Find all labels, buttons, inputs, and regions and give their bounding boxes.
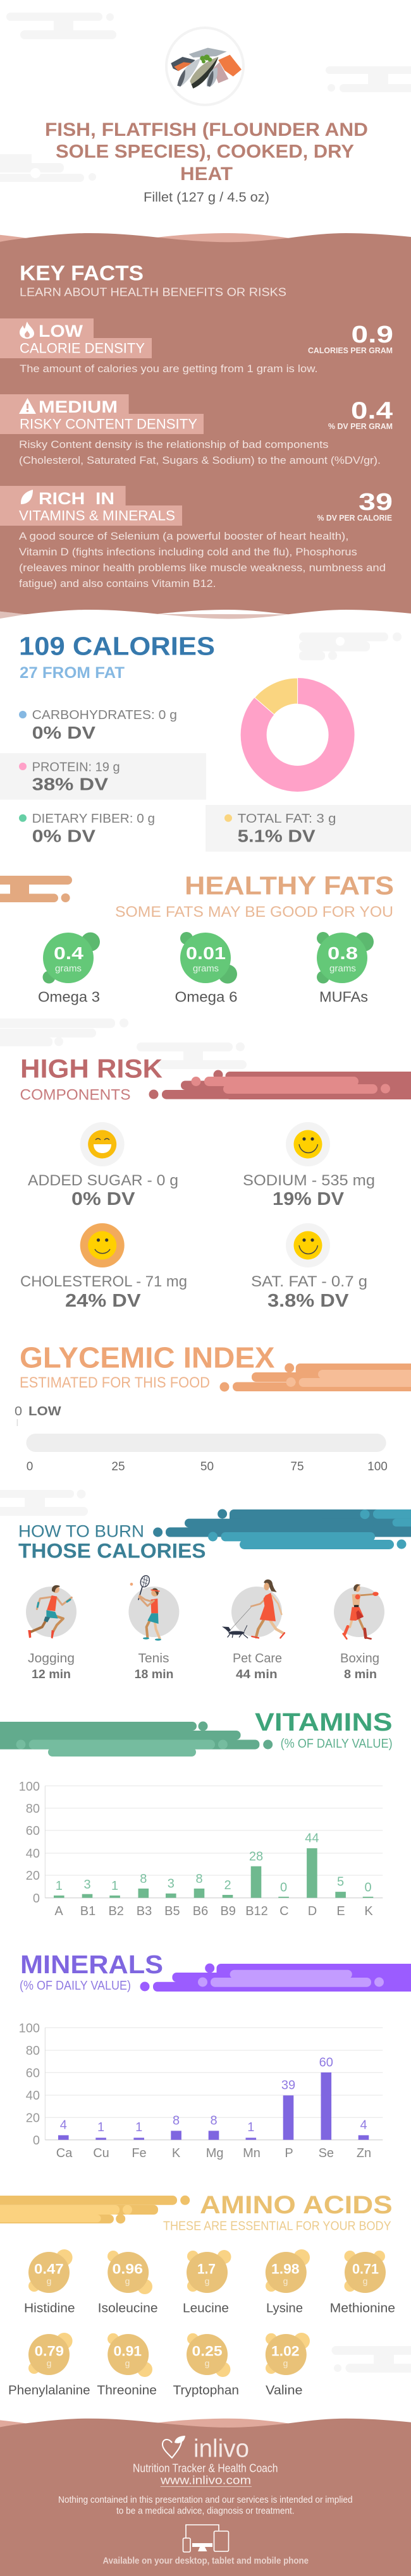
bar chart: vitamins: 3 bbox=[83, 1878, 91, 1892]
heading: AMINO ACIDS bbox=[200, 2191, 393, 2219]
macro: carbohydrates bbox=[19, 708, 177, 742]
bar chart: minerals: 4 bbox=[360, 2118, 367, 2132]
heading: 109 CALORIES bbox=[19, 632, 215, 661]
fact: rich in vitamins and minerals: 39 bbox=[359, 489, 393, 516]
bar chart: vitamins: K bbox=[364, 1904, 373, 1918]
stat: MUFAs: 0.8 bbox=[328, 943, 358, 963]
macro: total fat: 5.1% DV bbox=[238, 826, 316, 846]
fact: risky content density bbox=[0, 394, 393, 466]
fact: rich in vitamins and minerals: A good source of Selenium (a powerful booster of heart health), bbox=[19, 530, 348, 542]
title: HEAT bbox=[180, 164, 233, 184]
fact: risky content density: MEDIUM bbox=[39, 397, 118, 416]
heading bbox=[20, 1341, 275, 1391]
ornament bbox=[153, 1509, 411, 1549]
item: added sugar: 0% DV bbox=[71, 1189, 135, 1209]
gauge: LOW bbox=[28, 1405, 61, 1418]
icon: devices bbox=[183, 2525, 229, 2552]
bar chart: vitamins: 80 bbox=[26, 1802, 40, 1816]
amino: methionine bbox=[330, 2251, 395, 2315]
title bbox=[45, 119, 368, 184]
bar chart: vitamins: B6 bbox=[193, 1904, 208, 1918]
stat: omega 3: Omega 3 bbox=[38, 989, 100, 1005]
bar chart: minerals: 80 bbox=[26, 2044, 40, 2058]
item: saturated fat bbox=[251, 1223, 367, 1311]
gauge: 50 bbox=[200, 1460, 214, 1473]
bar chart: vitamins: 2 bbox=[224, 1878, 231, 1892]
heading: HOW TO BURN bbox=[18, 1521, 144, 1540]
bar chart: vitamins: E bbox=[336, 1904, 345, 1918]
macro: dietary fiber bbox=[19, 812, 155, 846]
bar chart: minerals: Mg bbox=[206, 2146, 223, 2160]
disclaimer bbox=[58, 2494, 353, 2516]
amino: methionine: 0.71 bbox=[352, 2261, 379, 2277]
heading: COMPONENTS bbox=[20, 1087, 130, 1104]
bar chart: minerals: 60 bbox=[26, 2066, 40, 2080]
bar chart: vitamins: B2 bbox=[108, 1904, 124, 1918]
amino: phenylalanine bbox=[8, 2333, 90, 2397]
macro: protein: PROTEIN: 19 g bbox=[32, 760, 120, 774]
panel: amino acids bbox=[0, 2191, 395, 2397]
ornament bbox=[0, 876, 72, 902]
amino: phenylalanine: Phenylalanine bbox=[8, 2383, 90, 2397]
stat: omega 6: 0.01 bbox=[186, 943, 226, 963]
heading: HIGH RISK bbox=[20, 1054, 163, 1084]
fact: calorie density: CALORIE DENSITY bbox=[20, 341, 145, 356]
bar chart: vitamins: 40 bbox=[26, 1847, 40, 1861]
panel: glycemic index bbox=[15, 1341, 411, 1473]
fact: risky content density: % DV PER GRAM bbox=[328, 422, 393, 431]
bar chart: vitamins bbox=[19, 1780, 383, 1918]
fact: rich in vitamins and minerals: RICH IN bbox=[39, 489, 114, 508]
gauge: 0 bbox=[15, 1405, 22, 1418]
fact: risky content density: Risky Content density is the relationship of bad components bbox=[19, 438, 329, 450]
heading bbox=[20, 1950, 163, 1993]
title: FISH, FLATFISH (FLOUNDER AND bbox=[45, 119, 368, 140]
heading: SOME FATS MAY BE GOOD FOR YOU bbox=[115, 904, 393, 921]
gauge bbox=[15, 1405, 388, 1473]
bar chart: vitamins: 100 bbox=[19, 1780, 40, 1794]
amino: histidine: 0.47 bbox=[34, 2261, 64, 2277]
bar chart: minerals: 20 bbox=[26, 2112, 40, 2126]
item: cholesterol bbox=[20, 1223, 187, 1311]
panel: key facts bbox=[0, 233, 411, 619]
heading: (% OF DAILY VALUE) bbox=[281, 1737, 393, 1751]
panel: footer bbox=[0, 2419, 411, 2576]
bar chart: vitamins: 5 bbox=[337, 1875, 344, 1889]
amino: histidine: g bbox=[47, 2276, 51, 2286]
bar chart: vitamins: B5 bbox=[164, 1904, 180, 1918]
amino: lysine bbox=[266, 2249, 310, 2315]
ornament bbox=[149, 1070, 411, 1099]
bar chart: vitamins: 44 bbox=[305, 1832, 319, 1846]
bar chart: minerals: 1 bbox=[247, 2120, 254, 2134]
fact: risky content density: 0.4 bbox=[351, 398, 393, 425]
heading: THESE ARE ESSENTIAL FOR YOUR BODY bbox=[163, 2219, 391, 2233]
amino: leucine: 1.7 bbox=[197, 2261, 216, 2277]
fact: rich in vitamins and minerals: Vitamin D (fights infections including cold and the flu), Phosphorus bbox=[19, 546, 357, 558]
fact: calorie density bbox=[0, 318, 393, 375]
ornament bbox=[0, 2196, 190, 2223]
stat: MUFAs: grams bbox=[329, 964, 356, 974]
bar chart: vitamins: 0 bbox=[280, 1881, 287, 1895]
fact: risky content density: (Cholesterol, Saturated Fat, Sugars & Sodium) to the amount (%DV/gr). bbox=[19, 454, 381, 466]
availability note: Available on your desktop, tablet and mobile phone bbox=[102, 2555, 309, 2566]
macro: dietary fiber: DIETARY FIBER: 0 g bbox=[32, 812, 155, 826]
bar chart: vitamins: 8 bbox=[140, 1872, 147, 1886]
bar chart: vitamins: 3 bbox=[168, 1877, 175, 1891]
panel: how to burn those calories bbox=[18, 1509, 411, 1681]
item: added sugar bbox=[28, 1122, 178, 1209]
fact: rich in vitamins and minerals: (releaves minor health problems like muscle weakness, numbness and bbox=[19, 562, 386, 574]
bar chart: vitamins: 0 bbox=[364, 1881, 372, 1895]
amino: tryptophan bbox=[173, 2333, 239, 2397]
item: added sugar: ADDED SUGAR - 0 g bbox=[28, 1172, 178, 1189]
fact: calorie density: CALORIES PER GRAM bbox=[308, 346, 393, 355]
heading: ESTIMATED FOR THIS FOOD bbox=[20, 1374, 210, 1391]
amino: phenylalanine: g bbox=[47, 2358, 51, 2368]
ornament bbox=[140, 1964, 411, 1992]
heading bbox=[20, 1054, 163, 1104]
bar chart: minerals: Cu bbox=[93, 2146, 109, 2160]
bar chart: vitamins: 8 bbox=[195, 1872, 203, 1886]
amino: isoleucine: Isoleucine bbox=[98, 2301, 158, 2315]
activity: pet care: Pet Care bbox=[233, 1652, 282, 1666]
donut chart bbox=[254, 678, 341, 778]
amino: methionine: Methionine bbox=[330, 2301, 395, 2315]
amino: leucine bbox=[183, 2250, 231, 2315]
fact: rich in vitamins and minerals bbox=[0, 486, 393, 590]
item: sodium: 19% DV bbox=[273, 1189, 345, 1209]
bar chart: minerals: 8 bbox=[210, 2114, 218, 2128]
amino: lysine: Lysine bbox=[266, 2301, 303, 2315]
fact: calorie density: The amount of calories you are getting from 1 gram is low. bbox=[20, 363, 318, 375]
heading: THOSE CALORIES bbox=[18, 1540, 206, 1563]
macro: total fat: TOTAL FAT: 3 g bbox=[238, 812, 336, 826]
amino: histidine bbox=[24, 2249, 75, 2315]
icon: fish photo in circle bbox=[166, 28, 243, 105]
amino: isoleucine: 0.96 bbox=[113, 2261, 143, 2277]
bar chart: vitamins: B12 bbox=[245, 1904, 268, 1918]
panel: minerals bbox=[19, 1950, 411, 2160]
bar chart: vitamins: B3 bbox=[137, 1904, 152, 1918]
amino: threonine: g bbox=[125, 2358, 130, 2368]
bar chart: vitamins: C bbox=[279, 1904, 289, 1918]
activity: boxing: Boxing bbox=[340, 1652, 379, 1666]
bar chart: vitamins: 60 bbox=[26, 1824, 40, 1838]
bar chart: minerals: 100 bbox=[19, 2022, 40, 2036]
amino: methionine: g bbox=[363, 2276, 367, 2286]
bar chart: vitamins: B9 bbox=[220, 1904, 236, 1918]
bar chart: minerals: Ca bbox=[56, 2146, 73, 2160]
item: sodium bbox=[243, 1122, 375, 1209]
amino: lysine: g bbox=[283, 2276, 288, 2286]
heading bbox=[115, 871, 394, 921]
fact: calorie density: 0.9 bbox=[352, 322, 393, 348]
gauge: 25 bbox=[111, 1460, 125, 1473]
heading: KEY FACTS bbox=[20, 262, 144, 285]
fact: rich in vitamins and minerals: % DV PER CALORIE bbox=[317, 514, 392, 523]
serving size: Fillet (127 g / 4.5 oz) bbox=[144, 190, 269, 205]
amino: phenylalanine: 0.79 bbox=[35, 2343, 64, 2359]
stat: omega 6 bbox=[175, 932, 238, 1005]
bar chart: vitamins: A bbox=[54, 1904, 63, 1918]
bar chart: vitamins: 0 bbox=[33, 1892, 40, 1906]
bar chart: vitamins: B1 bbox=[80, 1904, 95, 1918]
tagline and website: Nutrition Tracker & Health Coach bbox=[133, 2462, 278, 2474]
item: saturated fat: 3.8% DV bbox=[267, 1291, 349, 1311]
amino: leucine: g bbox=[205, 2276, 209, 2286]
macro: total fat bbox=[206, 805, 411, 852]
item: cholesterol: 24% DV bbox=[65, 1291, 141, 1311]
bar chart: minerals: 0 bbox=[33, 2134, 40, 2148]
macro: carbohydrates: 0% DV bbox=[32, 723, 95, 742]
activity: jogging: 12 min bbox=[32, 1668, 71, 1681]
item: cholesterol: CHOLESTEROL - 71 mg bbox=[20, 1273, 187, 1290]
stat: MUFAs: MUFAs bbox=[319, 989, 368, 1005]
stat: omega 3 bbox=[38, 933, 100, 1005]
bar chart: minerals bbox=[19, 2022, 383, 2160]
tagline and website: www.inlivo.com bbox=[160, 2474, 251, 2487]
heading bbox=[163, 2191, 393, 2233]
gauge: 75 bbox=[290, 1460, 304, 1473]
ornament bbox=[220, 1364, 411, 1391]
bar chart: minerals: P bbox=[285, 2146, 293, 2160]
activity: pet care: 44 min bbox=[236, 1668, 278, 1681]
stat: omega 6: Omega 6 bbox=[175, 989, 238, 1005]
bar chart: minerals: Mn bbox=[243, 2146, 261, 2160]
stat: omega 3: grams bbox=[55, 964, 82, 974]
amino: threonine: Threonine bbox=[97, 2383, 157, 2397]
macro: dietary fiber: 0% DV bbox=[32, 826, 95, 846]
title: SOLE SPECIES), COOKED, DRY bbox=[56, 142, 354, 162]
activity: boxing bbox=[334, 1584, 384, 1681]
heading: HEALTHY FATS bbox=[185, 871, 394, 900]
item: saturated fat: SAT. FAT - 0.7 g bbox=[251, 1273, 367, 1290]
heading: (% OF DAILY VALUE) bbox=[20, 1979, 131, 1993]
amino: lysine: 1.98 bbox=[271, 2261, 300, 2277]
activity: tennis bbox=[128, 1575, 179, 1681]
ornament bbox=[0, 1721, 273, 1757]
amino: threonine bbox=[97, 2333, 157, 2397]
amino: isoleucine bbox=[98, 2251, 158, 2315]
panel: calories bbox=[0, 632, 411, 852]
heading: LEARN ABOUT HEALTH BENEFITS OR RISKS bbox=[20, 286, 286, 299]
amino: leucine: Leucine bbox=[183, 2301, 229, 2315]
amino: histidine: Histidine bbox=[24, 2301, 75, 2315]
bar chart: minerals: 8 bbox=[173, 2114, 180, 2128]
bar chart: minerals: Zn bbox=[357, 2146, 371, 2160]
activity: tennis: Tenis bbox=[138, 1652, 169, 1666]
fact: calorie density: LOW bbox=[39, 322, 83, 341]
bar chart: minerals: 1 bbox=[97, 2120, 104, 2134]
tagline and website bbox=[133, 2462, 278, 2487]
heading: GLYCEMIC INDEX bbox=[20, 1341, 275, 1374]
bar chart: minerals: 39 bbox=[281, 2079, 295, 2093]
bar chart: minerals: 4 bbox=[60, 2118, 67, 2132]
activity: pet care bbox=[222, 1580, 285, 1681]
bar chart: vitamins: 20 bbox=[26, 1869, 40, 1883]
bar chart: vitamins: D bbox=[308, 1904, 317, 1918]
macro: protein bbox=[0, 753, 206, 800]
stat: omega 6: grams bbox=[193, 964, 219, 974]
header: food image and title bbox=[45, 28, 368, 205]
amino: tryptophan: Tryptophan bbox=[173, 2383, 239, 2397]
logo: inlivo: inlivo bbox=[193, 2434, 249, 2462]
heading bbox=[18, 1521, 206, 1563]
disclaimer: to be a medical advice, diagnosis or treatment. bbox=[116, 2505, 295, 2516]
activity: jogging: Jogging bbox=[28, 1652, 75, 1666]
gauge: 0 bbox=[27, 1460, 33, 1473]
bar chart: minerals: Fe bbox=[132, 2146, 147, 2160]
stat: omega 3: 0.4 bbox=[54, 943, 83, 963]
activity: tennis: 18 min bbox=[135, 1668, 173, 1681]
fact: risky content density: RISKY CONTENT DENSITY bbox=[20, 416, 197, 432]
amino: valine: Valine bbox=[266, 2383, 302, 2397]
panel: high risk components bbox=[20, 1054, 411, 1311]
amino: tryptophan: g bbox=[205, 2358, 209, 2368]
amino: threonine: 0.91 bbox=[114, 2343, 142, 2359]
item: sodium: SODIUM - 535 mg bbox=[243, 1172, 375, 1189]
panel: vitamins bbox=[0, 1708, 393, 1918]
bar chart: vitamins: 1 bbox=[111, 1879, 118, 1893]
bar chart: vitamins: 28 bbox=[249, 1850, 263, 1864]
heading bbox=[255, 1708, 393, 1751]
amino: valine: g bbox=[283, 2358, 288, 2368]
activity: boxing: 8 min bbox=[344, 1668, 377, 1681]
bar chart: minerals: Se bbox=[319, 2146, 334, 2160]
bar chart: minerals: K bbox=[172, 2146, 181, 2160]
panel: healthy fats bbox=[0, 871, 394, 1005]
bar chart: minerals: 1 bbox=[135, 2120, 142, 2134]
bar chart: vitamins: 1 bbox=[56, 1879, 63, 1893]
fact: rich in vitamins and minerals: VITAMINS & MINERALS bbox=[19, 508, 175, 524]
amino: tryptophan: 0.25 bbox=[192, 2343, 223, 2359]
logo: inlivo bbox=[163, 2434, 249, 2462]
heading: 27 FROM FAT bbox=[20, 664, 125, 682]
amino: valine: 1.02 bbox=[271, 2343, 300, 2359]
macro: carbohydrates: CARBOHYDRATES: 0 g bbox=[32, 708, 177, 722]
activity: jogging bbox=[26, 1585, 77, 1681]
heading bbox=[20, 262, 286, 299]
disclaimer: Nothing contained in this presentation and our services is intended or implied bbox=[58, 2494, 353, 2505]
bar chart: minerals: 40 bbox=[26, 2089, 40, 2103]
heading: VITAMINS bbox=[255, 1708, 393, 1736]
heading: MINERALS bbox=[20, 1950, 163, 1979]
heading bbox=[19, 632, 215, 682]
amino: valine bbox=[266, 2333, 310, 2397]
gauge: 100 bbox=[367, 1460, 388, 1473]
macro: protein: 38% DV bbox=[32, 775, 108, 794]
stat: MUFAs bbox=[317, 932, 374, 1005]
amino: isoleucine: g bbox=[125, 2276, 130, 2286]
bar chart: minerals: 60 bbox=[319, 2055, 333, 2069]
fact: rich in vitamins and minerals: fatigue) and also contains Vitamin B12. bbox=[19, 577, 216, 590]
